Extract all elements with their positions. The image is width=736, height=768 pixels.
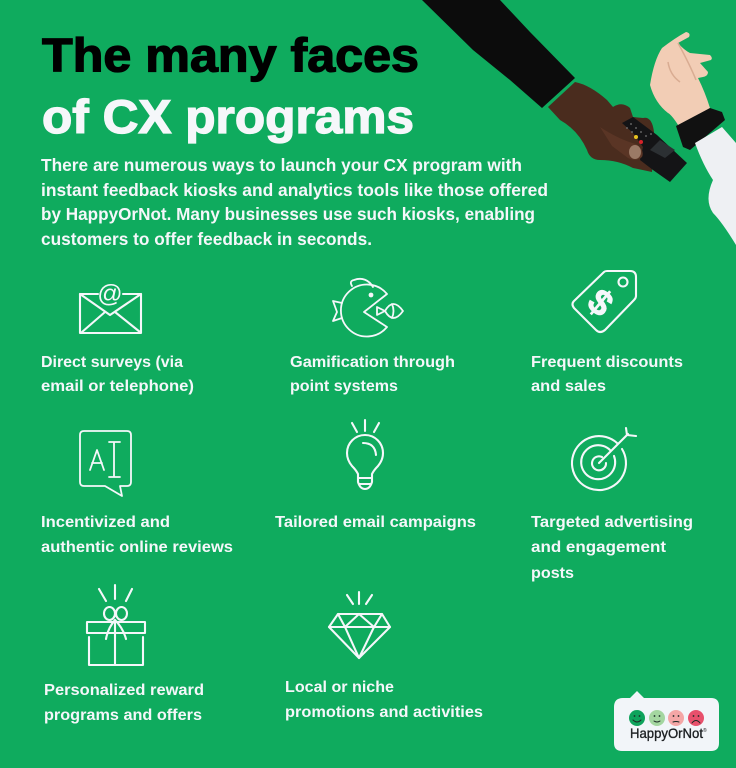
finger creases bbox=[668, 43, 696, 82]
label: Incentivized and bbox=[41, 514, 170, 531]
icon: diamond bbox=[329, 592, 390, 658]
item: direct surveys bbox=[41, 280, 194, 395]
item: email campaigns bbox=[275, 420, 476, 531]
label: and sales bbox=[531, 378, 606, 395]
label: Tailored email campaigns bbox=[275, 514, 476, 531]
label: and engagement bbox=[531, 539, 667, 556]
icon: big fish eating small fish bbox=[333, 279, 403, 336]
icon: envelope with at sign: @ bbox=[97, 280, 123, 308]
icon: target with arrow bbox=[572, 428, 636, 490]
item: targeted advertising bbox=[531, 428, 693, 582]
icon: light bulb bbox=[347, 420, 383, 489]
item: local promotions bbox=[285, 592, 483, 721]
label: point systems bbox=[290, 378, 398, 395]
label bbox=[531, 354, 683, 395]
label bbox=[44, 682, 204, 724]
label: programs and offers bbox=[44, 707, 202, 724]
title: The many faces bbox=[42, 28, 419, 82]
smartwatch bbox=[676, 108, 725, 150]
wordmark: HappyOrNot bbox=[630, 725, 703, 741]
white sleeve bbox=[695, 127, 736, 245]
thumb bbox=[600, 127, 643, 160]
logo bubble background bbox=[614, 691, 719, 751]
label bbox=[290, 354, 455, 395]
label bbox=[41, 354, 194, 395]
label: Targeted advertising bbox=[531, 514, 693, 531]
label: Personalized reward bbox=[44, 682, 204, 699]
label: promotions and activities bbox=[285, 704, 483, 721]
label: Frequent discounts bbox=[531, 354, 683, 371]
photo: hands with payment terminal bbox=[422, 0, 736, 245]
icon: price tag with dollar: $ bbox=[580, 280, 622, 325]
registered mark: ® bbox=[703, 727, 707, 734]
icon: gift box bbox=[87, 585, 145, 665]
smiley faces bbox=[629, 710, 704, 726]
card terminal bbox=[622, 117, 687, 182]
intro text block: instant feedback kiosks and analytics tools like those offered bbox=[41, 180, 548, 200]
label: posts bbox=[531, 565, 574, 582]
label: authentic online reviews bbox=[41, 539, 233, 556]
intro text block bbox=[41, 155, 548, 249]
label: email or telephone) bbox=[41, 378, 194, 395]
dark hand bbox=[548, 82, 654, 172]
label: Direct surveys (via bbox=[41, 354, 183, 371]
item: online reviews bbox=[41, 431, 233, 556]
label bbox=[41, 514, 233, 556]
item: gamification bbox=[290, 279, 455, 395]
item: discounts bbox=[531, 271, 683, 395]
intro text block: There are numerous ways to launch your CX program with bbox=[41, 155, 522, 175]
black sleeve arm bbox=[422, 0, 575, 108]
label bbox=[285, 679, 483, 721]
logo: HappyOrNot bubble bbox=[614, 691, 719, 751]
intro text block: by HappyOrNot. Many businesses use such kiosks, enabling bbox=[41, 204, 535, 224]
icon: speech bubble with AI bbox=[80, 431, 131, 496]
item: reward programs bbox=[44, 585, 204, 724]
light hand bbox=[650, 32, 712, 128]
label: Gamification through bbox=[290, 354, 455, 371]
label: Local or niche bbox=[285, 679, 394, 696]
label bbox=[531, 514, 693, 582]
title: of CX programs bbox=[42, 90, 414, 143]
icon: envelope with at sign bbox=[80, 280, 141, 333]
intro text block: customers to offer feedback in seconds. bbox=[41, 229, 372, 249]
icon: price tag with dollar bbox=[572, 271, 636, 332]
title bbox=[42, 28, 419, 143]
thumbnail bbox=[629, 145, 641, 159]
